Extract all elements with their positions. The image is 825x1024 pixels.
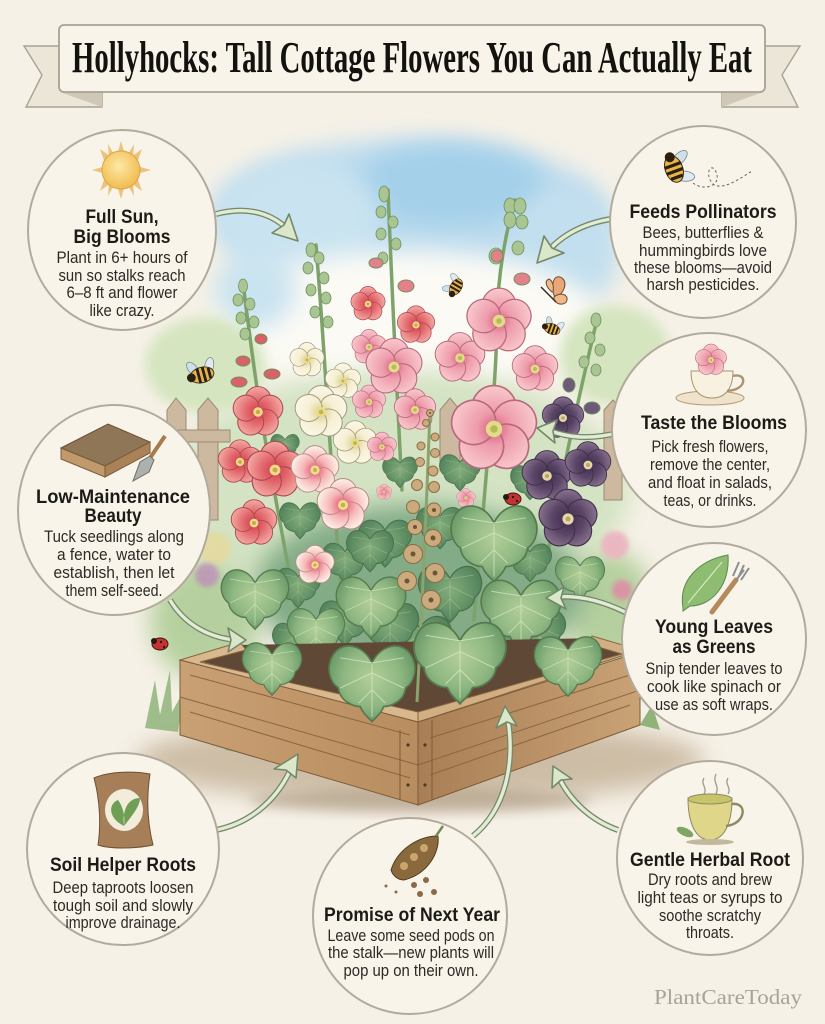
body text: harsh pesticides. xyxy=(646,276,760,294)
icon: bee and dotted trail xyxy=(660,146,752,190)
body text: 6–8 ft and flower xyxy=(66,284,178,302)
title banner xyxy=(24,25,800,107)
arrow: soil helper xyxy=(216,754,298,830)
icon: teacup with flower xyxy=(676,344,744,405)
body text: light teas or syrups to xyxy=(638,889,782,907)
arrow: young leaves xyxy=(546,587,625,612)
body text xyxy=(634,224,772,294)
heading: Gentle Herbal Root xyxy=(630,850,791,871)
body text xyxy=(44,528,184,600)
icon: seed tray and trowel xyxy=(61,424,165,481)
butterfly xyxy=(541,277,567,304)
body text: these blooms—avoid xyxy=(634,259,772,277)
panel: young leaves as greens xyxy=(622,543,806,735)
body text: and float in salads, xyxy=(648,474,772,492)
arrow: taste the blooms xyxy=(537,420,622,443)
body text: teas, or drinks. xyxy=(664,492,756,510)
body text: a fence, water to xyxy=(57,546,171,564)
body text: sun so stalks reach xyxy=(58,267,186,285)
panel: young leaves as greens: as Greens xyxy=(672,637,756,658)
body text: cook like spinach or xyxy=(647,678,781,696)
body text: soothe scratchy xyxy=(659,907,762,925)
panel: low-maintenance beauty: Beauty xyxy=(84,506,142,527)
flying bee right xyxy=(540,314,567,338)
icon: sun xyxy=(92,141,151,199)
body text: Leave some seed pods on xyxy=(328,927,494,945)
flying bee centre xyxy=(439,270,467,299)
body text xyxy=(638,871,782,942)
body text: Snip tender leaves to xyxy=(646,660,782,678)
seed pod stalk xyxy=(398,410,444,702)
icon: leaf and fork xyxy=(682,555,749,612)
body text: Deep taproots loosen xyxy=(52,879,194,897)
ladybug lower left xyxy=(151,638,168,650)
body text xyxy=(646,660,782,714)
body text: the stalk—new plants will xyxy=(328,944,494,962)
panel: feeds pollinators xyxy=(610,126,796,318)
ladybug on leaf xyxy=(503,493,521,505)
right ribbon tail xyxy=(722,46,800,107)
body text: like crazy. xyxy=(90,302,154,320)
hollyhock blooms xyxy=(215,287,614,587)
icon: soil bag xyxy=(94,772,153,848)
body text xyxy=(52,879,194,932)
body text: them self-seed. xyxy=(66,582,162,600)
body text: use as soft wraps. xyxy=(655,696,773,714)
wooden fence xyxy=(160,398,622,560)
body text: Plant in 6+ hours of xyxy=(56,249,188,267)
raised wooden bed xyxy=(180,636,640,805)
heading: Young Leaves xyxy=(655,617,773,638)
panel: taste the blooms xyxy=(612,333,806,527)
middle leaves xyxy=(221,506,605,659)
panel: full sun: Big Blooms xyxy=(74,227,170,248)
body text: pop up on their own. xyxy=(344,962,478,980)
panel: full sun xyxy=(28,130,216,330)
watercolor sky xyxy=(210,140,620,390)
body text: Dry roots and brew xyxy=(648,871,772,889)
arrow: promise of next year xyxy=(473,706,517,836)
front leaves xyxy=(242,623,602,722)
arrow: low maintenance xyxy=(170,600,246,652)
right ribbon fold xyxy=(722,92,763,107)
heading: Soil Helper Roots xyxy=(50,855,196,876)
arrow: gentle herbal root xyxy=(552,766,618,830)
body text: tough soil and slowly xyxy=(53,897,194,915)
heading: Low-Maintenance xyxy=(36,487,190,508)
heading: Promise of Next Year xyxy=(324,905,501,926)
body text: establish, then let xyxy=(54,564,175,582)
watermark: PlantCareToday xyxy=(654,985,803,1009)
ground wash xyxy=(135,670,705,812)
body text: Bees, butterflies & xyxy=(642,224,764,242)
body text xyxy=(56,249,188,320)
body text: throats. xyxy=(686,924,734,942)
body text: remove the center, xyxy=(650,456,770,474)
heading: Feeds Pollinators xyxy=(630,202,776,223)
body text xyxy=(648,438,772,510)
panel: low-maintenance beauty xyxy=(18,405,210,615)
body text xyxy=(328,927,494,980)
left ribbon tail xyxy=(24,46,102,107)
background garden foliage xyxy=(145,305,670,680)
heading: Taste the Blooms xyxy=(641,413,787,434)
body text: improve drainage. xyxy=(66,914,180,932)
body text: Tuck seedlings along xyxy=(44,528,184,546)
arrow: sun to flowers xyxy=(216,211,298,241)
icon: herbal tea xyxy=(675,774,743,845)
banner body xyxy=(59,25,765,92)
flower stems xyxy=(243,190,598,640)
icon: seed pod xyxy=(384,826,443,897)
body text: hummingbirds love xyxy=(639,242,767,260)
panel: soil helper roots xyxy=(27,753,219,945)
body text: Pick fresh flowers, xyxy=(652,438,768,456)
arrow: pollinators xyxy=(537,219,611,263)
background flowers xyxy=(195,531,632,600)
panel: gentle herbal root xyxy=(617,761,803,955)
heading: Full Sun, xyxy=(86,207,158,228)
left ribbon fold xyxy=(60,92,102,107)
back foliage xyxy=(271,434,566,676)
flying bee left xyxy=(183,354,220,386)
panel: promise of next year xyxy=(313,818,507,1014)
stem buds xyxy=(231,186,605,414)
